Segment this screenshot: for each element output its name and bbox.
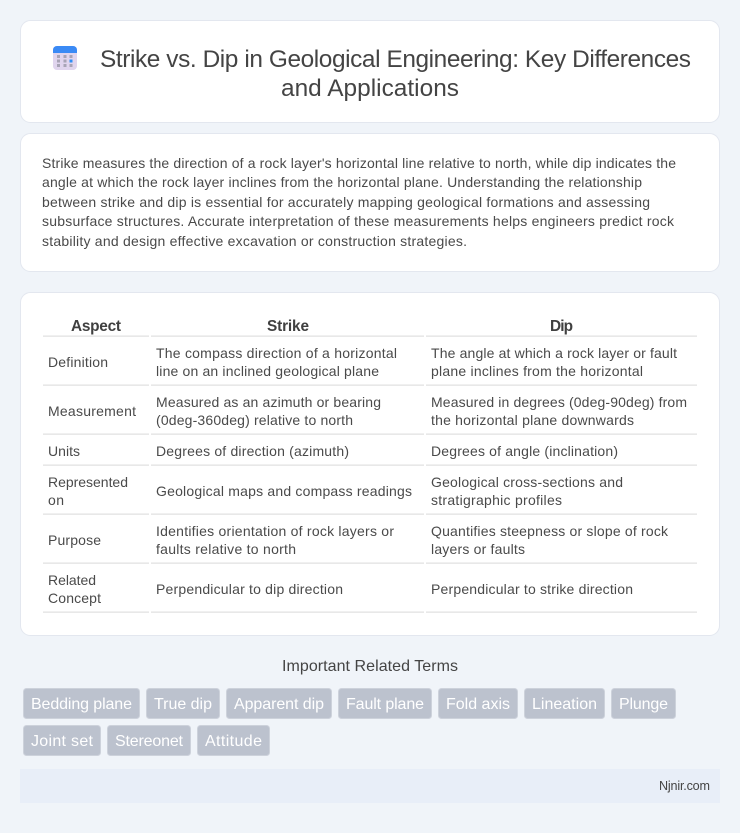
row: measurement: (0deg-360deg) relative to north [156, 412, 353, 428]
related term tags: Apparent dip [234, 696, 324, 713]
row: related concept [48, 572, 633, 606]
row: represented on [48, 474, 623, 508]
row: represented on: Represented [48, 474, 128, 490]
row: represented on: on [48, 492, 64, 508]
related term tags: Stereonet [115, 733, 184, 750]
text block: introduction paragraph: between strike and dip is essential for accurately mapping geological formations and assessing [42, 194, 650, 210]
title [100, 46, 691, 102]
related term tags: Lineation [532, 696, 597, 713]
related term tags: Plunge [619, 696, 668, 713]
row: definition: The angle at which a rock layer or fault [431, 345, 677, 361]
row: units: Degrees of angle (inclination) [431, 443, 618, 459]
row: measurement: the horizontal plane downwards [431, 412, 634, 428]
row: units [48, 443, 618, 459]
title: Strike vs. Dip in Geological Engineering: Key Differences [100, 46, 691, 73]
row: purpose: layers or faults [431, 541, 525, 557]
related term tags: Fold axis [446, 696, 510, 713]
text block: introduction paragraph: stability and design effective excavation or construction strategies. [42, 233, 467, 249]
row: definition [48, 345, 677, 379]
text block: introduction paragraph: subsurface structures. Accurate interpretation of these measurements helps engineers predict rock [42, 213, 675, 229]
row: definition: plane inclines from the horizontal [431, 363, 643, 379]
row: purpose: Identifies orientation of rock layers or [156, 523, 394, 539]
row: measurement [48, 394, 687, 428]
row: measurement: Measured in degrees (0deg-90deg) from [431, 394, 687, 410]
text block: introduction paragraph: Strike measures the direction of a rock layer's horizontal line relative to north, while dip indicates the [42, 155, 676, 171]
heading: important related terms: Important Related Terms [282, 658, 458, 675]
row: related concept: Related [48, 572, 96, 588]
table header: Aspect [71, 318, 121, 335]
panel: introduction [20, 134, 720, 272]
row: represented on: Geological cross-sections and [431, 474, 623, 490]
row: related concept: Concept [48, 590, 101, 606]
row: purpose: Purpose [48, 532, 101, 548]
row: units: Units [48, 443, 80, 459]
icon: calendar [53, 46, 77, 70]
header panel [20, 20, 720, 122]
row: definition: line on an inclined geological plane [156, 363, 379, 379]
table header: Strike [267, 318, 309, 335]
related term tags [24, 688, 676, 756]
row: represented on: stratigraphic profiles [431, 492, 562, 508]
panel: comparison table [20, 292, 720, 636]
related term tags: Bedding plane [31, 696, 132, 713]
footer: Njnir.com [659, 779, 710, 793]
footer [20, 769, 720, 803]
row: units: Degrees of direction (azimuth) [156, 443, 349, 459]
row: purpose: faults relative to north [156, 541, 296, 557]
row: related concept: Perpendicular to dip direction [156, 581, 343, 597]
related term tags: True dip [154, 696, 212, 713]
row: measurement: Measured as an azimuth or bearing [156, 394, 381, 410]
title: and Applications [281, 75, 459, 102]
related term tags: Fault plane [346, 696, 424, 713]
table header [71, 318, 573, 335]
row: purpose: Quantifies steepness or slope of rock [431, 523, 669, 539]
row: definition: Definition [48, 354, 108, 370]
row: related concept: Perpendicular to strike direction [431, 581, 633, 597]
text block: introduction paragraph: angle at which the rock layer inclines from the horizontal plane. Understanding the relationship [42, 174, 642, 190]
related term tags: Attitude [205, 733, 262, 750]
row: represented on: Geological maps and compass readings [156, 483, 412, 499]
text block: introduction paragraph [42, 155, 676, 249]
row: measurement: Measurement [48, 403, 136, 419]
row: definition: The compass direction of a horizontal [156, 345, 397, 361]
table header: Dip [550, 318, 573, 335]
row: purpose [48, 523, 669, 557]
related term tags: Joint set [31, 733, 94, 750]
